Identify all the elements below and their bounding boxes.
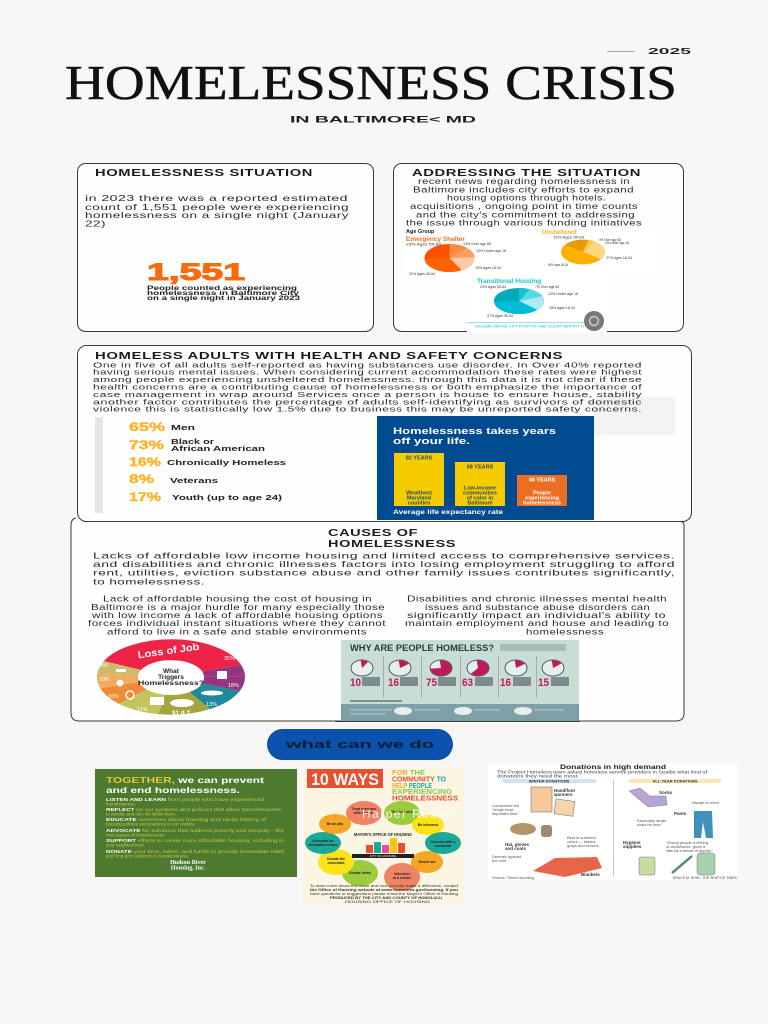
donut chart: what triggers homelessness: 35% — [224, 656, 235, 662]
poster: together we can prevent and end homelessness: and long-term solutions to homelessness. — [106, 854, 189, 858]
poster: together we can prevent and end homelessness: root causes of homelessness. — [106, 832, 166, 838]
fine print: HOUSING OFFICE OF HOUSING — [345, 900, 431, 904]
poster: 10 ways to help: FOR THE — [392, 768, 425, 777]
chart: age group pies: Age Group — [406, 229, 435, 235]
column: winter donations: the cold — [492, 858, 506, 863]
caption: 1,551: People counted as experiencing — [147, 286, 298, 292]
stats list: demographics: Veterans — [170, 478, 218, 485]
pie chart: emergency shelter: 12% Under age 18 — [476, 248, 507, 253]
donut chart: what triggers homelessness: Triggers — [158, 674, 184, 681]
pie chart: transitional housing: 12% Under age 18 — [548, 291, 579, 296]
poster: together we can prevent and end homelessness: Housing, Inc. — [171, 866, 206, 872]
heading: causes of homelessness: HOMELESSNESS — [328, 539, 456, 550]
ring of ten actions: Reach out — [419, 860, 436, 864]
bar chart: life expectancy: Average life expectancy rate — [393, 510, 504, 516]
column: all-year donations: Always in need — [692, 800, 719, 805]
column: all-year donations — [623, 778, 738, 880]
bar chart: life expectancy: communities — [463, 490, 497, 496]
donut chart: what triggers homelessness: 9% — [100, 663, 108, 669]
column: winter donations: Hand/foot — [554, 788, 575, 793]
stats list: demographics: 65% — [129, 420, 165, 434]
poster: 10 ways to help — [303, 767, 464, 904]
donut chart: what triggers homelessness: $1.9 T — [172, 710, 190, 717]
chart: age group pies — [404, 229, 656, 333]
column: winter donations: grays and browns — [567, 843, 599, 848]
poster: together we can prevent and end homelessness: SUPPORT efforts to create more affordable housing, including in — [106, 838, 285, 843]
poster: together we can prevent and end homelessness: DONATE your time, talent, and funds to provide immediate relief — [106, 849, 285, 854]
pie chart: transitional housing: Transitional Housing — [477, 278, 541, 285]
panel: addressing the situation — [394, 164, 684, 333]
text block: situation summary — [85, 193, 350, 228]
title: HOMELESSNESS CRISIS — [65, 55, 677, 110]
ring of ten actions: with respect — [353, 811, 375, 815]
column: winter donations: and coats — [505, 846, 527, 851]
column: all-year donations: supplies — [623, 844, 642, 849]
heading: causes of homelessness: CAUSES OF — [328, 528, 418, 539]
pie chart: emergency shelter — [406, 236, 507, 276]
column: all-year donations: Especially larger — [637, 818, 667, 823]
column: winter donations: "single most — [492, 807, 515, 812]
pie chart: unsheltered: 4% Under age 18 — [605, 240, 630, 245]
stats list: demographics: Youth (up to age 24) — [172, 495, 282, 502]
poster: together we can prevent and end homelessness: ADVOCATE for solutions that address poverty and inequity - the — [106, 828, 285, 833]
column: all-year donations: Hygiene — [623, 840, 641, 845]
heading: addressing the situation: ADDRESSING THE SITUATION — [412, 168, 641, 179]
button: what can we do: what can we do — [284, 739, 435, 751]
stats list: demographics: 17% — [129, 490, 161, 504]
column: winter donations: colors — blacks, — [567, 839, 596, 844]
poster: together we can prevent and end homelessness: homelessness. — [106, 802, 136, 806]
ring of ten actions: Connect with a — [431, 840, 455, 844]
text block: health and safety summary: health concerns are a contributing cause of homelessness or both emphasize the importance of — [93, 382, 643, 392]
infographic: why are people homeless: 15 — [538, 677, 549, 689]
column: all-year donations: little bit a sense of dignity." — [666, 848, 714, 853]
donut chart: what triggers homelessness: 10% — [108, 694, 119, 700]
column: winter donations: Source: Times reporting — [492, 875, 534, 880]
infographic: why are people homeless — [335, 640, 580, 722]
stats list: demographics: African American — [171, 446, 265, 453]
stats list: demographics: 16% — [129, 455, 161, 469]
pie chart: unsheltered — [542, 230, 633, 267]
button: what can we do — [267, 729, 453, 760]
text block: causes summary — [93, 550, 675, 586]
column: all-year donations: Socks — [659, 790, 673, 795]
pie chart: unsheltered: 27% Ages 18-34 — [606, 255, 633, 260]
column: winter donations: Best in subdued — [567, 835, 596, 840]
ring of ten actions: Advocate for — [312, 839, 334, 843]
bar chart: life expectancy: counties — [408, 500, 430, 506]
text block: affordable housing: Baltimore is a major hurdle for many especially those — [91, 602, 385, 612]
ring of ten actions: at a shelter — [393, 876, 412, 880]
pie chart: emergency shelter: 32% Ages 35-54 — [409, 271, 436, 276]
text block: health and safety summary — [93, 360, 643, 414]
column: all-year donations: "Giving people a feeling — [666, 840, 708, 845]
infographic: why are people homeless: 10 — [350, 677, 361, 689]
poster: together we can prevent and end homelessness: your neighborhood. — [106, 842, 145, 848]
text block: health and safety summary: another factor contributes the percentage of adults self-identifying as survivors of domestic — [93, 398, 642, 406]
column: all-year donations: sizes for men — [637, 822, 661, 827]
logo: homes in the center: MAYOR'S OFFICE OF HOUSING — [354, 832, 412, 837]
chart: donations in high demand: Donations in high demand — [560, 765, 666, 771]
text block: affordable housing — [88, 594, 386, 636]
column: winter donations — [492, 778, 602, 880]
bar chart: life expectancy: homelessness — [523, 500, 561, 506]
text block: situation summary: homelessness on a single night (January — [85, 210, 350, 220]
bar chart: life expectancy: of color in — [467, 496, 494, 502]
text block: causes summary: to homelessness. — [93, 576, 205, 586]
ring of ten actions: essentials — [328, 861, 345, 865]
caption: 1,551: homelessness in Baltimore City — [147, 291, 300, 297]
pie chart: unsheltered: 4% Over age 65 — [599, 237, 622, 242]
watermark text: Harper Russo — [362, 807, 452, 821]
infographic: why are people homeless: 75 — [426, 677, 437, 689]
panel: homelessness situation — [78, 164, 374, 332]
text block: disabilities and illness: significantly impact an individual's ability to — [407, 610, 666, 620]
stats list: demographics: Men — [171, 425, 195, 432]
poster: together we can prevent and end homelessness: housing policies and practices in our country. — [106, 822, 195, 826]
column: winter donations: Blankets — [581, 872, 600, 877]
poster: 10 ways to help: HOMELESSNESS — [392, 794, 458, 802]
text block: causes summary: rent, utilities, eviction substance abuse and other family issues contributes significantly, — [93, 568, 675, 578]
poster: together we can prevent and end homelessness: LISTEN AND LEARN from people who have experienced — [106, 797, 265, 802]
pie chart: unsheltered: Unsheltered — [542, 230, 577, 236]
bar chart: life expectancy: Low-income — [464, 486, 496, 492]
ring of ten actions: Donate the — [327, 857, 345, 861]
fine print: To learn more about this issue and how you can make a difference, contact — [310, 884, 458, 888]
column: all-year donations: Pants — [674, 811, 687, 816]
pie chart: unsheltered: 15% Ages 55-64 — [553, 234, 585, 240]
fine print: PRODUCED BY THE CITY AND COUNTY OF HONOLULU — [330, 896, 443, 900]
fine print: the Office of Housing website at www.homeless.gov/housing. If you — [310, 888, 458, 892]
text block: health and safety summary: violence this is statistically low 1.5% due to business this may be unreported safety concerns. — [93, 404, 642, 414]
infographic: why are people homeless: 63 — [462, 677, 473, 689]
bar chart: life expectancy: 48 YEARS — [529, 478, 556, 484]
column: winter donations: Considered the — [492, 803, 520, 808]
heading: health and safety concerns: HOMELESS ADULTS WITH HEALTH AND SAFETY CONCERNS — [95, 351, 563, 362]
fine print: have questions or suggestions please email the Mayor's Office of Housing — [310, 892, 458, 896]
year label — [607, 46, 692, 56]
poster: together we can prevent and end homelessness: to persist, and our role within them. — [106, 812, 176, 816]
pie chart: transitional housing: 7% Over age 65 — [535, 284, 560, 289]
pie chart: emergency shelter: Emergency Shelter — [406, 236, 465, 243]
pie chart: emergency shelter: 23% Ages 55-64 — [406, 242, 442, 246]
pie chart: transitional housing — [467, 273, 607, 333]
bar chart: life expectancy — [377, 416, 594, 520]
text block: addressing summary — [406, 176, 642, 228]
text block: affordable housing: forces individual instant situations where they cannot — [88, 618, 386, 628]
poster: together we can prevent and end homelessness: EDUCATE ourselves about housing and racist history of — [106, 817, 267, 822]
column: winter donations: warmers — [553, 792, 573, 797]
ring of ten actions: Donate items — [349, 871, 371, 875]
donut chart: what triggers homelessness: 11% — [137, 707, 148, 713]
bar chart: life expectancy: Baltimore — [467, 500, 493, 506]
poster: 10 ways to help: COMMUNITY TO — [392, 774, 446, 784]
bar chart: life expectancy: Maryland — [407, 496, 431, 502]
bar chart: life expectancy: off your life. — [393, 436, 470, 447]
poster: together we can prevent and end homelessness — [95, 769, 297, 877]
pie chart: transitional housing: 37% Ages 35-54 — [487, 313, 514, 318]
text block: affordable housing: afford to live in a safe and stable environments — [107, 626, 367, 636]
text block: disabilities and illness: issues and substance abuse disorders can — [425, 602, 650, 612]
text block: situation summary: count of 1,551 people were experiencing — [85, 202, 349, 212]
donut chart: what triggers homelessness — [99, 642, 239, 717]
text block: disabilities and illness — [405, 594, 669, 636]
stats list: demographics — [95, 417, 286, 513]
text block: disabilities and illness: maintain employment and house and leading to — [405, 618, 669, 628]
text block: causes summary: Lacks of affordable low income housing and limited access to comprehensive services. — [93, 550, 675, 560]
text block: affordable housing: Lack of affordable housing the cost of housing in — [103, 594, 372, 604]
poster: 10 ways to help: 10 WAYS — [311, 770, 379, 789]
stats list: demographics: Black or — [171, 439, 214, 446]
stats list: demographics: Chronically Homeless — [167, 460, 286, 467]
text block: situation summary: in 2023 there was a reported estimated — [85, 193, 348, 203]
text block: addressing summary: recent news regarding homelessness in — [418, 176, 630, 186]
pie chart: unsheltered: 50% Ages 35-54 — [548, 262, 569, 267]
column: winter donations: important item" — [492, 811, 519, 816]
column: all-year donations: ALL-YEAR DONATIONS — [652, 778, 698, 784]
poster: together we can prevent and end homelessness: Hudson River — [170, 860, 206, 866]
column: all-year donations: of cleanliness, gives a — [666, 844, 706, 849]
poster: together we can prevent and end homelessness: REFLECT on our systems and policies that allow homelessness — [106, 807, 282, 812]
text block: disabilities and illness: Disabilities and chronic illnesses mental health — [407, 594, 667, 604]
pie chart: emergency shelter: 13% Over age 65 — [463, 241, 492, 246]
chart: donations in high demand: The Project Homeless team asked homeless service providers in Seattle what kind of — [497, 770, 708, 774]
text block: situation summary: 22) — [85, 218, 106, 228]
text block: health and safety summary: having serious mental issues. When considering current accommodation these rates were highest — [93, 368, 643, 376]
bar chart: life expectancy: 68 YEARS — [467, 464, 494, 470]
ring of ten actions: Get involved — [391, 810, 413, 814]
text block: health and safety summary: case management in wrap around Services once a person is house to ensure house, stability — [93, 390, 642, 399]
bar chart: life expectancy: experiencing — [525, 496, 559, 502]
ring of ten actions: counselor — [435, 844, 452, 848]
bar chart: life expectancy: Wealthest — [406, 490, 432, 496]
big number: 1,551: 1,551 — [147, 259, 245, 286]
poster: together we can prevent and end homelessness: and end homelessness. — [106, 785, 240, 795]
text block: addressing summary: and the city's commitment to addressing — [416, 210, 635, 220]
text block: causes summary: and disabilities and chronic illnesses factors into losing employment struggling to afford — [93, 559, 675, 569]
ring of ten actions: Volunteer — [394, 872, 411, 876]
column: winter donations: Defense against — [492, 854, 522, 859]
heading: homelessness situation: HOMELESSNESS SITUATION — [95, 168, 313, 179]
poster: together we can prevent and end homelessness: TOGETHER, we can prevent — [106, 775, 264, 785]
logo: homes in the center: CITY OF HOUSING — [370, 854, 397, 858]
chart: donations in high demand — [488, 763, 738, 880]
pie chart: transitional housing: 24% Ages 55-64 — [480, 284, 507, 289]
donut chart: what triggers homelessness: 10% — [99, 677, 110, 683]
text block: affordable housing: with low income a lack of affordable housing options — [91, 610, 383, 620]
stats list: demographics: 73% — [129, 438, 164, 452]
heading: causes of homelessness — [328, 528, 456, 550]
text block: health and safety summary: One in five of all adults self-reported as having substances use disorder. In Over 40% reported — [93, 360, 642, 370]
infographic: why are people homeless: 16 — [500, 677, 511, 689]
ring of ten actions: Treat everyone — [352, 807, 376, 811]
text block: addressing summary: the issue through various funding initiatives — [406, 218, 642, 228]
text block: addressing summary: acquisitions , ongoing point in time counts — [410, 201, 638, 211]
ring of ten actions — [305, 801, 461, 891]
ring of ten actions: Be an ally — [327, 822, 343, 826]
logo: homes in the center — [352, 832, 414, 858]
caption: 1,551 — [147, 286, 301, 302]
bar chart: life expectancy: 82 YEARS — [406, 456, 433, 462]
infographic: why are people homeless: WHY ARE PEOPLE HOMELESS? — [350, 643, 494, 654]
donut chart: what triggers homelessness: Loss of Job — [137, 642, 200, 661]
poster: 10 ways to help: HELP PEOPLE — [392, 781, 432, 790]
text block: health and safety summary: among people experiencing unsheltered homelessness. through this data it is not clear if these — [93, 375, 642, 384]
text block: disabilities and illness: homelessness — [526, 626, 604, 636]
column: all-year donations: GRACE M. SHIN / THE SEATTLE TIMES — [673, 876, 738, 880]
pie chart: transitional housing: 2023 BALTIMORE CITY POINT-IN-TIME COUNT REPORT 17 — [475, 324, 585, 328]
pie chart: transitional housing: 18% Ages 18-34 — [549, 305, 576, 310]
donut chart: what triggers homelessness: Homelessness? — [138, 680, 204, 687]
donut chart: what triggers homelessness: What — [163, 668, 180, 675]
text block: addressing summary: housing options through hotels. — [447, 192, 606, 202]
column: winter donations: Hat, gloves — [505, 842, 530, 847]
stats list: demographics: 8% — [129, 472, 154, 486]
year label: 2025 — [648, 46, 692, 56]
panel: homeless adults with health and safety concerns — [78, 346, 692, 522]
chart: donations in high demand: donations they need the most. — [497, 774, 579, 778]
ring of ten actions: affordable homes — [308, 843, 338, 847]
subtitle: IN BALTIMORE< MD — [290, 114, 476, 126]
pie chart: emergency shelter: 19% Ages 18-34 — [475, 265, 502, 270]
text block: addressing summary: Baltimore includes city efforts to expand — [413, 184, 634, 194]
poster: 10 ways to help: EXPERIENCING — [392, 787, 452, 796]
donut chart: what triggers homelessness: 13% — [206, 702, 217, 708]
donut chart: what triggers homelessness: 18% — [228, 683, 239, 689]
bar chart: life expectancy: Homelessness takes years — [393, 426, 556, 437]
column: winter donations: WINTER DONATIONS — [529, 778, 570, 784]
caption: 1,551: on a single night in January 2023 — [147, 296, 301, 302]
fine print — [310, 884, 458, 904]
infographic: why are people homeless: 16 — [388, 677, 399, 689]
bar chart: life expectancy: People — [533, 490, 551, 496]
ring of ten actions: Be informed — [418, 823, 438, 827]
panel: causes of homelessness — [71, 518, 684, 722]
